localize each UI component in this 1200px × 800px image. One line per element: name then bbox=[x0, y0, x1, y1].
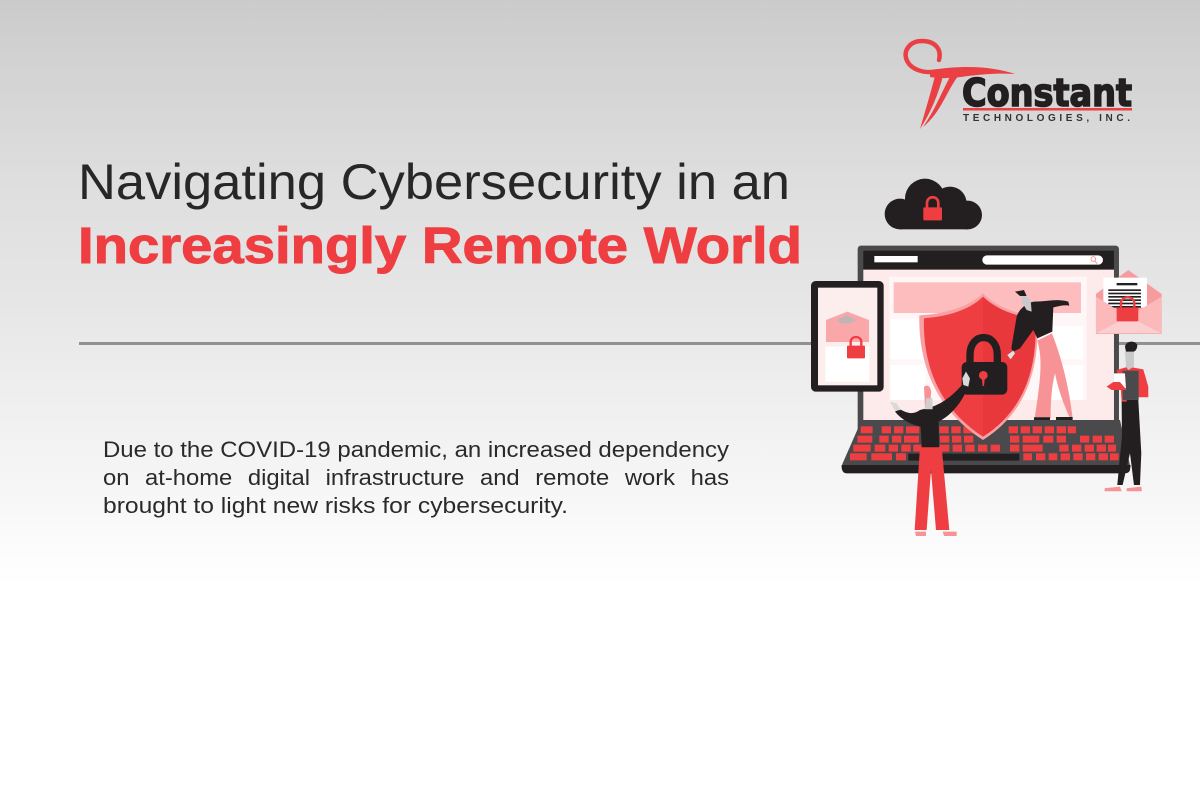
figure: person standing right of the laptop bbox=[1105, 342, 1148, 491]
web page blocks bbox=[889, 277, 1087, 400]
icon: cloud with padlock bbox=[885, 179, 982, 229]
logo swoosh mark bbox=[906, 41, 1015, 129]
logo wordmark: Constant bbox=[962, 71, 1132, 115]
intro text block bbox=[103, 437, 730, 518]
divider line bbox=[79, 342, 1200, 345]
intro text block: Due to the COVID-19 pandemic, an increased dependency bbox=[103, 437, 730, 462]
icon: large padlock bbox=[962, 337, 1007, 395]
spacebar bbox=[908, 454, 1019, 461]
figure: person on top of the shield bbox=[1007, 290, 1073, 420]
logo tagline: TECHNOLOGIES, INC. bbox=[963, 113, 1130, 124]
icon: envelope with padlock bbox=[1096, 270, 1162, 334]
illustration: laptop security scene bbox=[811, 179, 1162, 536]
intro text block: brought to light new risks for cybersecurity. bbox=[103, 493, 568, 518]
keyboard deck bbox=[842, 420, 1130, 473]
laptop screen frame bbox=[858, 246, 1119, 432]
intro text block: on at-home digital infrastructure and remote work has bbox=[103, 465, 729, 490]
logo: Constant Technologies bbox=[906, 41, 1132, 129]
icon: tablet with padlock bbox=[811, 281, 884, 392]
laptop bbox=[842, 246, 1131, 473]
figure: person holding the padlock bbox=[890, 372, 970, 536]
icon: shield bbox=[919, 293, 1038, 440]
title: Navigating Cybersecurity in an bbox=[78, 154, 790, 210]
title: Increasingly Remote World bbox=[78, 217, 802, 274]
title bbox=[78, 154, 802, 274]
